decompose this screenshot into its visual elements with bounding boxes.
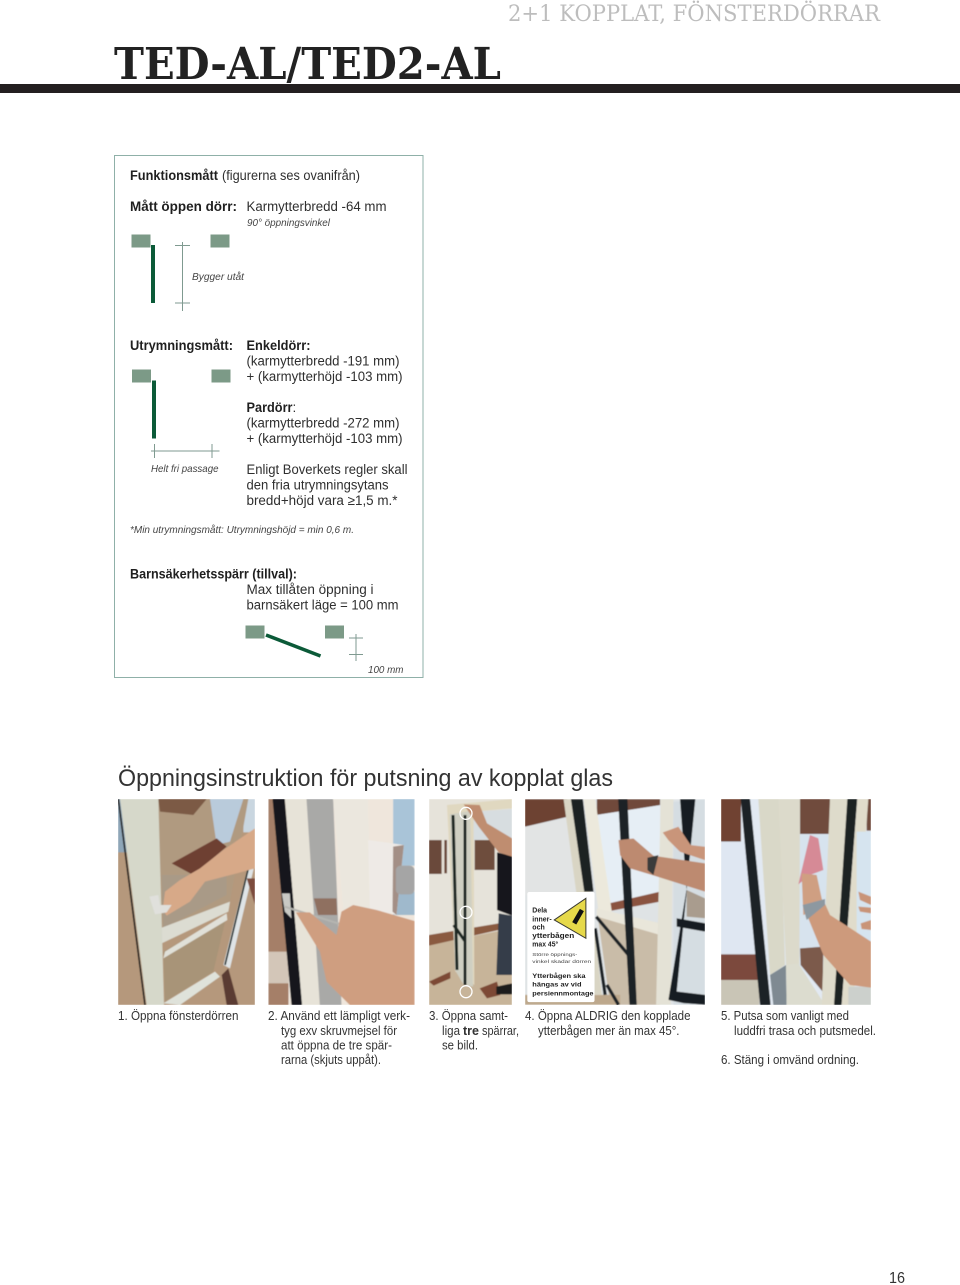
caption 2 [268, 1009, 410, 1067]
text: escape dimensions: Pardörr [246, 400, 293, 415]
text: child safety lock: Barnsäkerhetsspärr (tillval): [130, 566, 297, 582]
warning sign: persiennmontage [532, 990, 594, 997]
diagram: free passage [132, 370, 230, 475]
text: escape dimensions: Utrymningsmått: [130, 338, 233, 353]
marker: lock bottom [460, 986, 472, 998]
caption 2: 2. Använd ett lämpligt verk- [268, 1009, 410, 1023]
caption 5 and 6: 6. Stäng i omvänd ordning. [721, 1053, 859, 1067]
caption 3: se bild. [442, 1038, 478, 1052]
warning sign: och [532, 925, 545, 932]
title: TED-AL/TED2-AL [114, 39, 501, 90]
caption 2: tyg exv skruvmejsel för [281, 1024, 397, 1038]
diagram: child safety opening [246, 626, 404, 676]
caption 4: ytterbågen mer än max 45°. [538, 1024, 680, 1038]
caption 3: liga [442, 1024, 460, 1038]
diagram: door open 90 degrees: Bygger utåt [192, 271, 245, 283]
section label: product type: 2+1 KOPPLAT, FÖNSTERDÖRRAR [508, 0, 881, 27]
text: escape dimensions [130, 338, 408, 508]
caption 2: rarna (skjuts uppåt). [281, 1053, 381, 1067]
text: open door dimension [130, 199, 386, 229]
text: escape dimensions: + (karmytterhöjd -103 mm) [246, 369, 402, 384]
caption 4 [525, 1009, 691, 1038]
warning sign [527, 892, 595, 1002]
warning sign: inner- [532, 916, 552, 923]
text: escape dimensions: bredd+höjd vara ≥1,5 m.* [246, 493, 398, 508]
text: escape dimensions: Enkeldörr: [246, 338, 310, 353]
warning sign: hängas av vid [532, 982, 582, 989]
footnote: *Min utrymningsmått: Utrymningshöjd = min 0,6 m. [130, 524, 354, 536]
photo 2: tool on the lock [268, 799, 415, 1005]
caption 3 [429, 1009, 519, 1052]
warning sign: Större öppnings- [532, 952, 578, 958]
caption 3: spärrar, [482, 1024, 519, 1038]
caption 3: tre [463, 1024, 479, 1038]
text: open door dimension: 90° öppningsvinkel [247, 217, 331, 229]
heading: opening instructions: Öppningsinstruktion för putsning av kopplat glas [118, 765, 613, 792]
text: child safety lock [130, 566, 398, 612]
warning sign: ytterbågen [532, 932, 574, 940]
photo 1: opening the door [118, 799, 255, 1005]
caption 1: 1. Öppna fönsterdörren [118, 1009, 239, 1023]
photo 3: opening three locks [429, 799, 512, 1005]
heading: functional dimensions [130, 168, 360, 183]
diagram: child safety opening: 100 mm [368, 664, 404, 676]
heading: functional dimensions: (figurerna ses ovanifrån) [222, 168, 360, 183]
caption 4: 4. Öppna ALDRIG den kopplade [525, 1009, 691, 1023]
warning sign: max 45° [532, 941, 558, 949]
text: child safety lock: Max tillåten öppning i [246, 582, 374, 597]
caption 2: att öppna de tre spär- [281, 1038, 392, 1052]
caption 3: 3. Öppna samt- [429, 1009, 508, 1023]
header bar [0, 84, 960, 93]
diagram: door open 90 degrees [132, 234, 245, 311]
text: escape dimensions: Enligt Boverkets regler skall [246, 462, 408, 477]
panel: functional dimensions [114, 156, 423, 678]
heading: functional dimensions: Funktionsmått [130, 168, 218, 183]
warning sign: vinkel skadar dörren [532, 959, 591, 965]
text: escape dimensions: den fria utrymningsytans [246, 478, 389, 492]
diagram: free passage: Helt fri passage [151, 463, 219, 475]
text: open door dimension: Karmytterbredd -64 mm [246, 199, 386, 214]
text: escape dimensions: : [292, 400, 296, 415]
text: escape dimensions: (karmytterbredd -191 mm) [246, 354, 400, 368]
photo 4: do not open more than 45 degrees [525, 799, 705, 1005]
marker: lock middle [460, 906, 472, 918]
text: escape dimensions: + (karmytterhöjd -103 mm) [246, 431, 402, 446]
marker: lock top [460, 807, 472, 819]
caption 5 and 6: 5. Putsa som vanligt med [721, 1009, 849, 1023]
text: child safety lock: barnsäkert läge = 100 mm [246, 598, 398, 612]
caption 5 and 6 [721, 1009, 876, 1067]
text: open door dimension: Mått öppen dörr: [130, 199, 237, 214]
warning sign: Ytterbågen ska [532, 972, 586, 980]
photo 5: cleaning the glass [721, 799, 871, 1005]
caption 5 and 6: luddfri trasa och putsmedel. [734, 1024, 876, 1038]
text: escape dimensions: (karmytterbredd -272 mm) [246, 416, 400, 430]
warning sign: Dela [532, 907, 547, 914]
